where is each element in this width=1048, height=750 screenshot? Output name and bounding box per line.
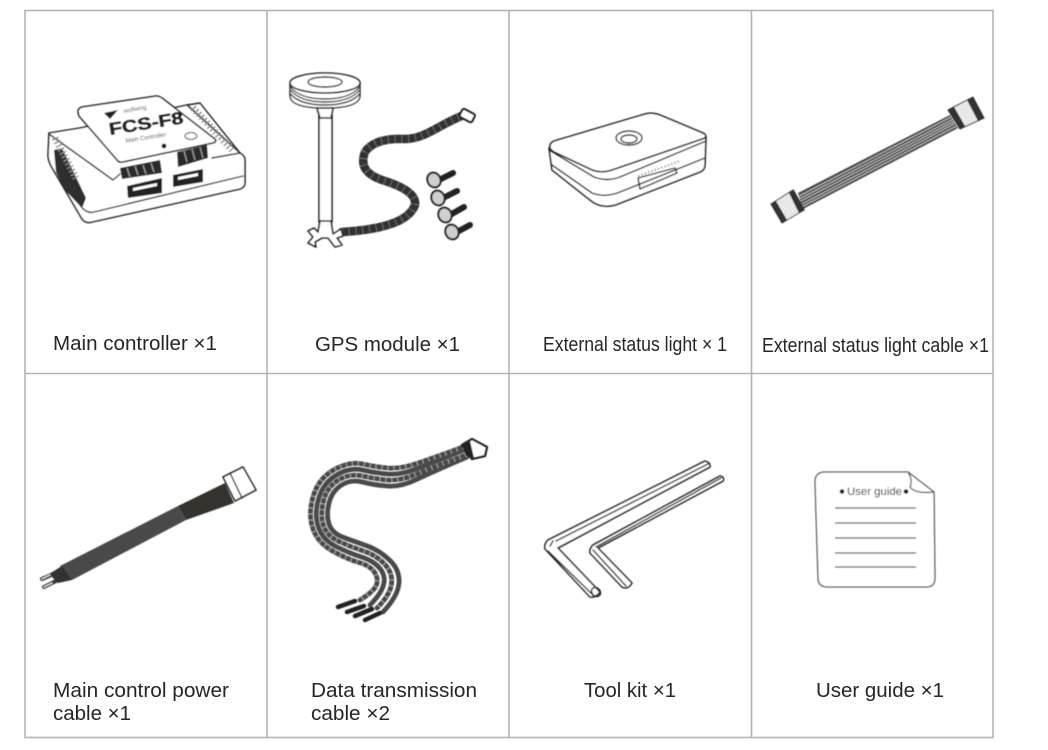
icon: status light cable [771,97,984,223]
label: Main control power [53,680,229,702]
panel: user guide [815,472,944,702]
icon: power cable [42,467,256,587]
screws [425,170,470,242]
panel: main controller [48,96,245,355]
panel: main control power cable: cable ×1 [53,703,131,725]
icon: data cable [310,439,487,620]
icon: hex keys [545,461,724,598]
icon: user guide document: User guide [847,486,902,498]
USB ports [127,178,162,198]
panel: external status light cable [762,97,989,357]
label: GPS module ×1 [315,334,460,356]
label: User guide ×1 [816,680,944,702]
icon: main controller: Main Controller [125,132,166,145]
icon: main controller: wolfwing [122,105,147,115]
panel: GPS module [290,73,476,356]
icon: GPS module [290,73,476,247]
icon: main controller: FCS-F8 [108,108,185,139]
icon: main controller [48,96,245,223]
panel: main control power cable [42,467,256,725]
label: Main controller ×1 [53,333,217,355]
label: External status light cable ×1 [762,335,989,357]
label: Tool kit ×1 [584,680,676,702]
connectors [120,160,162,179]
label: External status light × 1 [543,334,727,356]
top plate [78,96,216,162]
panel: external status light [543,113,727,356]
panel: data transmission cable: cable ×2 [311,703,390,725]
label: Data transmission [311,680,477,702]
icon: user guide document [815,472,935,587]
left connector strip [54,148,86,208]
base [308,221,343,247]
panel: data transmission cable [310,439,487,725]
panel: tool kit [545,461,724,702]
icon: status light [549,113,706,206]
